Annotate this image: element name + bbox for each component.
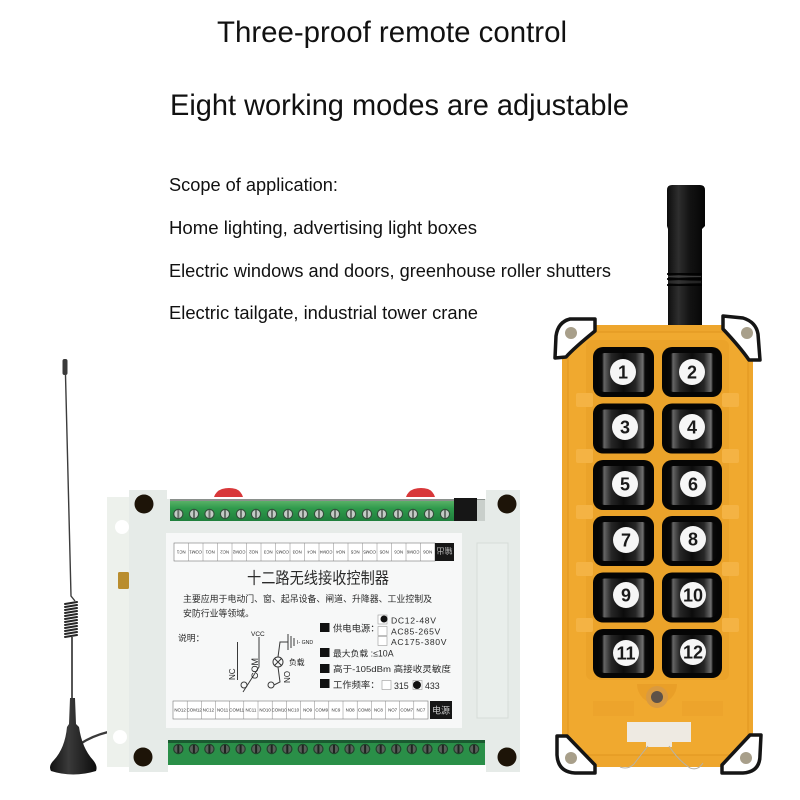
white tag and wires (620, 722, 703, 769)
corner bracket top right (723, 316, 760, 360)
wiring diagram: I- GND (297, 640, 313, 646)
recessed side panel (477, 543, 508, 718)
panel: wireless receiver controller (107, 488, 520, 772)
bottom output terminal labels: NC8 (374, 708, 383, 712)
button 4: 4 (687, 418, 697, 438)
button 3: 3 (620, 418, 630, 438)
wiring diagram: NC (228, 668, 237, 680)
bottom output terminal labels: COM8 (358, 708, 371, 712)
text block: scope of application: Home lighting, advertising light boxes (169, 218, 477, 238)
bottom terminal block (168, 740, 485, 765)
bottom output terminal labels (173, 701, 452, 719)
specification list: AC175-380V (391, 637, 447, 647)
bottom output terminal labels: NO7 (388, 708, 398, 712)
bottom output terminal labels: 电源 (432, 704, 450, 716)
button 5 (593, 460, 654, 510)
button 12: 12 (683, 642, 703, 662)
bottom output terminal labels: NO10 (259, 708, 271, 712)
bottom output terminal labels: COM10 (272, 708, 287, 712)
specification list: 最大负载 :≤10A (333, 648, 394, 658)
specification list: 供电电源： (333, 622, 380, 634)
button 3 (593, 404, 654, 454)
bottom output terminal labels: NO11 (217, 708, 229, 712)
bottom output terminal labels: NC11 (245, 708, 257, 712)
panel: twelve-button remote control (555, 185, 761, 773)
top output terminal labels: NC5 (350, 550, 360, 554)
button 11: 11 (616, 644, 636, 664)
text block: scope of application: Scope of application: (169, 175, 338, 195)
button 9 (593, 572, 654, 622)
wiring diagram (228, 631, 313, 692)
corner bracket bottom right (722, 735, 761, 773)
button 12 (662, 629, 722, 678)
title: Three-proof remote control (217, 16, 567, 49)
specification list: 工作频率： (333, 679, 380, 690)
usage description (183, 593, 432, 618)
button 5: 5 (620, 474, 630, 494)
status LED (637, 684, 677, 708)
button 9: 9 (621, 586, 631, 606)
button 11 (593, 629, 654, 678)
remote body (562, 325, 753, 767)
button 1 (593, 347, 654, 397)
bottom output terminal labels: NO9 (303, 708, 313, 712)
corner bracket top left (555, 319, 595, 358)
bottom output terminal labels: NO12 (174, 708, 186, 712)
top output terminal labels (174, 543, 454, 561)
top output terminal labels: COM1 (189, 550, 202, 554)
specification list: 高于-105dBm 高接收灵敏度 (333, 663, 451, 674)
button 8 (662, 516, 722, 566)
top output terminal labels: NO6 (423, 550, 432, 554)
text block: scope of application (169, 175, 611, 323)
top output terminal labels: 输出 (436, 546, 452, 556)
button 8: 8 (688, 530, 698, 550)
icon: SMA connector (118, 572, 129, 589)
specification list: 433 (425, 681, 440, 691)
bottom output terminal labels: NC7 (417, 708, 426, 712)
specification list: DC12-48V (391, 616, 437, 626)
button 7: 7 (621, 530, 631, 550)
bottom output terminal labels: NC10 (288, 708, 300, 712)
left mounting flange (107, 497, 132, 767)
top output terminal labels: NO1 (205, 550, 215, 554)
top output terminal labels: NO5 (379, 550, 389, 554)
button 1: 1 (618, 362, 628, 382)
mounting holes (134, 494, 516, 766)
icon: magnetic whip antenna (50, 359, 108, 774)
button 2: 2 (687, 362, 697, 382)
button 7 (593, 516, 654, 566)
top output terminal labels: NO3 (292, 550, 302, 554)
top output terminal labels: COM6 (406, 550, 420, 554)
instructions label: 说明： (178, 632, 204, 643)
usage description: 安防行业等领域。 (183, 608, 254, 618)
wiring diagram: VCC (251, 631, 265, 638)
bottom output terminal labels: COM7 (400, 708, 414, 712)
wiring diagram: NO (283, 671, 292, 683)
usage description: 主要应用于电动门、窗、起吊设备、闸道、升降器、工业控制及 (183, 593, 432, 604)
wiring diagram: COM (250, 658, 260, 679)
bottom output terminal labels: NC12 (203, 708, 215, 712)
top output terminal labels: NC6 (394, 550, 403, 554)
top output terminal labels: COM2 (232, 550, 246, 554)
top output terminal labels: NC1 (176, 550, 186, 554)
top output terminal labels: COM3 (276, 550, 289, 554)
bottom output terminal labels: NO8 (346, 708, 355, 712)
bottom output terminal labels: COM12 (187, 708, 202, 712)
specification list (320, 615, 451, 691)
top output terminal labels: COM5 (363, 550, 376, 554)
bottom output terminal labels: COM11 (229, 708, 245, 712)
corner bracket bottom left (557, 736, 595, 773)
button 6: 6 (688, 474, 698, 494)
button 6 (662, 460, 722, 510)
controller heading: 十二路无线接收控制器 (247, 570, 389, 588)
bottom output terminal labels: COM9 (315, 708, 329, 712)
button 4 (662, 404, 722, 454)
top output terminal labels: NO4 (336, 550, 345, 554)
specification list: 315 (394, 681, 409, 691)
text block: scope of application: Electric tailgate, industrial tower crane (169, 303, 478, 323)
label plate (166, 533, 462, 728)
text block: scope of application: Electric windows and doors, greenhouse roller shutters (169, 261, 611, 281)
top terminal block (170, 498, 485, 521)
red terminal clips (214, 488, 435, 497)
button 10 (662, 572, 722, 622)
right mounting flange and body (129, 490, 520, 772)
top output terminal labels: NO2 (249, 550, 258, 554)
wiring diagram: 负载 (289, 657, 305, 667)
specification list: AC85-265V (391, 626, 441, 636)
top output terminal labels: NC4 (307, 550, 316, 554)
top output terminal labels: COM4 (319, 550, 333, 554)
subtitle: Eight working modes are adjustable (170, 89, 629, 122)
bottom output terminal labels: NC9 (332, 708, 341, 712)
remote antenna (667, 185, 705, 325)
top output terminal labels: NC3 (263, 550, 273, 554)
button 10: 10 (683, 586, 703, 606)
button 2 (662, 347, 722, 397)
top output terminal labels: NC2 (220, 550, 229, 554)
